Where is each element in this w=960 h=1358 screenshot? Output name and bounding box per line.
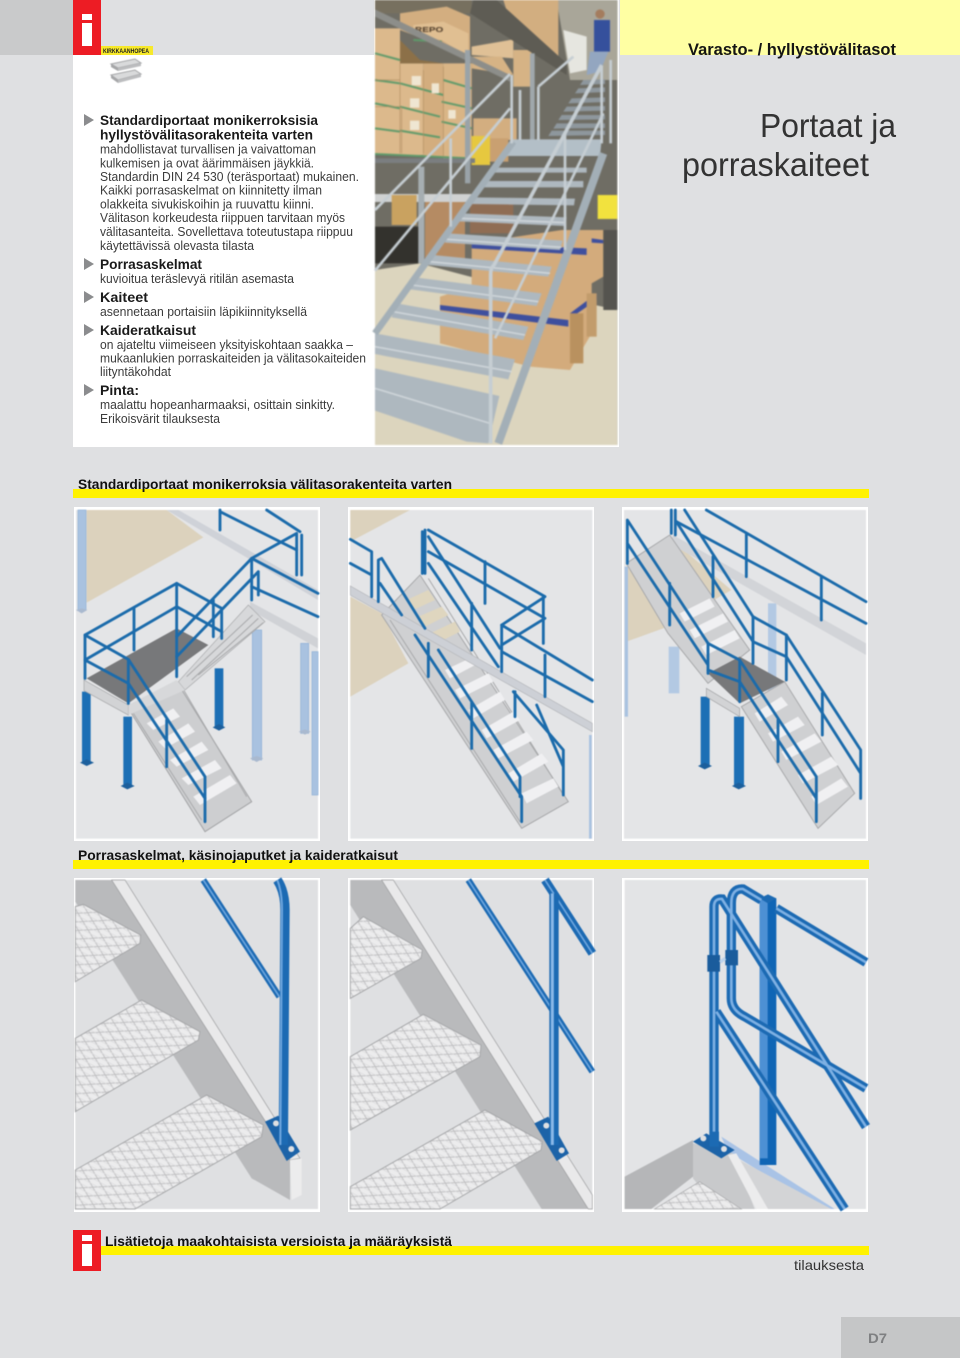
main description: hyllystövälitasorakenteita varten — [100, 126, 313, 142]
item: porrasaskelmat — [100, 256, 294, 286]
title: Portaat ja — [760, 107, 897, 144]
upper left cartons: REPO — [415, 25, 444, 34]
panel frame 3 — [622, 507, 868, 841]
section heading: treads and rails: Porrasaskelmat, käsinojaputket ja kaideratkaisut — [78, 847, 398, 863]
main description: Välitason korkeudesta riippuen tarvitaan myös — [100, 211, 345, 225]
photo frame — [374, 0, 619, 447]
panel: stair with landing, view 1 — [76, 508, 320, 839]
main description: Kaikki porrasaskelmat on kiinnitetty ilman — [100, 184, 322, 198]
title — [682, 107, 897, 183]
bullet marker 5 — [84, 384, 94, 396]
section bar: standard stairs — [73, 489, 869, 498]
yellow sign — [598, 195, 617, 219]
stair handrails — [375, 57, 611, 443]
floor — [375, 263, 617, 445]
icon: red info badge, footer — [73, 1230, 101, 1271]
text: on request: tilauksesta — [794, 1257, 864, 1273]
panel: post and clamp detail — [624, 880, 870, 1212]
item: kaiteet: asennetaan portaisiin läpikiinnityksellä — [100, 305, 307, 319]
text block: product description — [84, 112, 366, 426]
item: porrasaskelmat: Porrasaskelmat — [100, 256, 202, 272]
top left grey band — [0, 0, 73, 55]
bullet marker 1 — [84, 114, 94, 126]
item: pinta — [100, 382, 335, 426]
bullet marker 2 — [84, 258, 94, 270]
panel: intro text background — [73, 55, 375, 447]
page number: D7 — [868, 1330, 887, 1346]
item: kaideratkaisut — [100, 322, 366, 379]
panel frame 6 — [622, 878, 868, 1212]
icon: stacked steps — [110, 58, 142, 84]
panel frame 1 — [74, 507, 320, 841]
main description: Standardin DIN 24 530 (teräsportaat) mukainen. — [100, 170, 359, 184]
bullet marker 4 — [84, 324, 94, 336]
section bar: treads and rails — [73, 860, 869, 869]
photo: warehouse staircase — [372, 0, 618, 446]
main description: mahdollistavat turvallisen ja vaivattoman — [100, 142, 316, 156]
main description: kulkemisen ja ovat äärimmäisen jäykkiä. — [100, 156, 314, 170]
panel: stair with intermediate landing, view 3 — [624, 508, 868, 839]
item: kaideratkaisut: Kaideratkaisut — [100, 322, 196, 338]
page number — [841, 1317, 960, 1358]
top right yellow band — [620, 0, 960, 55]
panel frame 2 — [348, 507, 594, 841]
item: kaideratkaisut: on ajateltu viimeiseen yksityiskohtaan saakka – — [100, 338, 353, 352]
mid shelving and carton — [375, 50, 535, 263]
item: porrasaskelmat: kuvioitua teräslevyä ritilän asemasta — [100, 272, 294, 286]
section bar: more information — [100, 1246, 869, 1255]
landing — [503, 139, 602, 156]
main description: olakkeita sivukiskoihin ja ruuvattu kiinni. — [100, 198, 314, 212]
large cartons — [440, 230, 617, 370]
panel frame 5 — [348, 878, 594, 1212]
person on upper stairs — [587, 9, 610, 75]
main description — [100, 112, 359, 253]
main description: välitasanteita. Sovellettava toteutustapa riippuu — [100, 225, 353, 239]
main description: Standardiportaat monikerroksisia — [100, 112, 318, 128]
item: kaiteet: Kaiteet — [100, 289, 148, 305]
upper flight of stairs — [548, 79, 605, 136]
item: pinta: Erikoisvärit tilauksesta — [100, 412, 220, 426]
title: porraskaiteet — [682, 146, 869, 183]
item: kaideratkaisut: liityntäkohdat — [100, 365, 172, 379]
stair treads — [375, 168, 587, 443]
panel frame 4 — [74, 878, 320, 1212]
icon: red info badge — [73, 0, 101, 55]
panel: tread and post detail, end of stringer — [74, 876, 318, 1210]
section heading: standard stairs: Standardiportaat monikerroksia välitasorakenteita varten — [78, 476, 452, 492]
panel: straight stair, view 2 — [348, 510, 594, 840]
bullet marker 3 — [84, 291, 94, 303]
item: kaideratkaisut: mukaanlukien porraskaiteiden ja välitasokaiteiden — [100, 352, 366, 366]
upper right cartons and mezzanine — [375, 0, 567, 165]
panel: tread and post detail, mid stringer — [349, 877, 596, 1210]
item: pinta: Pinta: — [100, 382, 139, 398]
item: kaiteet — [100, 289, 307, 319]
header: section name: Varasto- / hyllystövälitasot — [688, 40, 896, 59]
main description: käytettävissä olevasta tilasta — [100, 239, 254, 253]
upper left cartons — [375, 7, 472, 158]
heading: more information: Lisätietoja maakohtaisista versioista ja määräyksistä — [105, 1233, 452, 1249]
stair stringers — [375, 142, 603, 443]
tread front edges — [375, 218, 566, 423]
item: pinta: maalattu hopeanharmaaksi, osittain sinkitty. — [100, 398, 335, 412]
